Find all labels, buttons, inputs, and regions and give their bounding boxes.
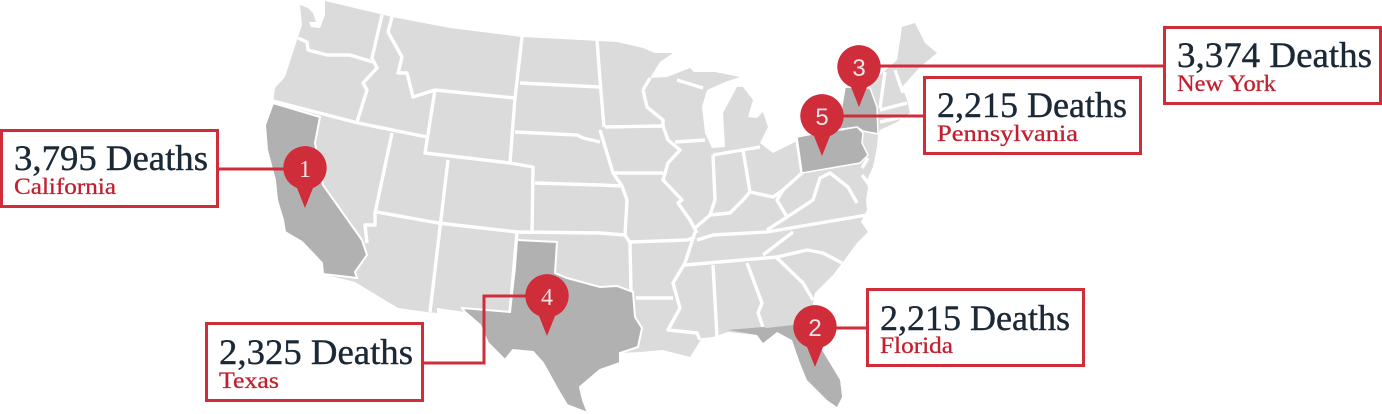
pin 4 (525, 274, 569, 336)
callout: California (2, 130, 287, 206)
pin 2 (793, 305, 837, 367)
callout: New York: 3,374 Deaths (1177, 35, 1372, 75)
callout: Florida (834, 290, 1084, 366)
callout: Pennsylvania: 2,215 Deaths (937, 85, 1127, 125)
callout: Texas: Texas (219, 368, 279, 393)
map silhouette (265, 1, 937, 413)
pin 1 (283, 146, 327, 208)
pin 4: 4 (541, 285, 553, 311)
pin 2: 2 (808, 315, 822, 342)
state: California (265, 103, 367, 278)
callout: Pennsylvania (842, 78, 1140, 154)
callout: Texas (206, 296, 528, 400)
map: contiguous United States (265, 1, 937, 413)
callout: Florida: Florida (880, 333, 953, 358)
state: New York (835, 87, 878, 134)
callout: California: 3,795 Deaths (14, 138, 208, 178)
state: Florida (728, 325, 842, 407)
pin 3 (837, 45, 881, 107)
callout: New York (878, 28, 1380, 104)
state borders (273, 15, 907, 340)
pin 3: 3 (852, 55, 866, 82)
pin 1: 1 (299, 157, 311, 183)
callout: Texas: 2,325 Deaths (219, 332, 413, 372)
pin 5: 5 (815, 104, 829, 131)
state: Pennsylvania (797, 127, 868, 173)
callout: New York: New York (1177, 71, 1277, 96)
callout: Pennsylvania: Pennsylvania (937, 121, 1078, 146)
callout: California: California (14, 174, 116, 199)
pin 5 (800, 94, 844, 156)
state: Texas (462, 240, 642, 413)
callout: Florida: 2,215 Deaths (880, 298, 1070, 338)
